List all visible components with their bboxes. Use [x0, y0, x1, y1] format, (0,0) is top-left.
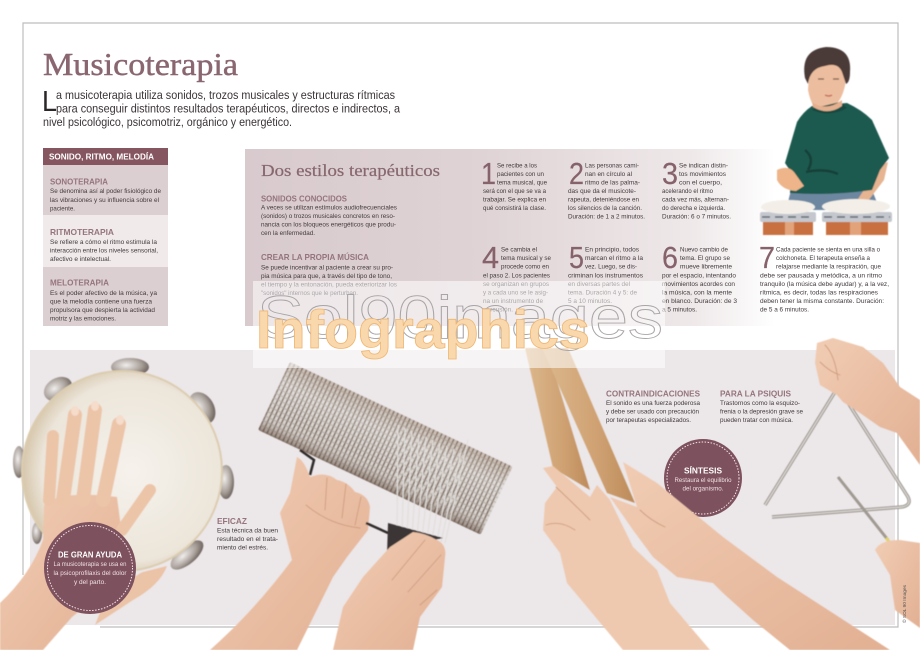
callout: para la psiquis	[720, 388, 803, 424]
step 5: vez. Luego, se dis-	[585, 264, 637, 270]
step 3	[662, 156, 731, 220]
guiro tines	[397, 425, 468, 543]
step 2: ritmo de las palma-	[585, 180, 640, 186]
badge: de gran ayuda: la psicoprofilaxis del dolor	[54, 570, 127, 577]
photo: boy playing bongos	[760, 47, 892, 235]
step 7: colchoneta. El terapeuta enseña a	[776, 255, 870, 262]
step 5: tema. Duración 4 y 5: de	[568, 290, 637, 296]
intro text: para conseguir distintos resultados terapéuticos, directos e indirectos, a	[56, 102, 400, 116]
callout: contraindicaciones	[606, 388, 700, 424]
text block: sonidos conocidos: nancia con los bloqueos energéticos que produ-	[261, 222, 396, 228]
sub-panel: sonoterapia: SONOTERAPIA	[50, 176, 108, 186]
sub-panel: sonoterapia: Se denomina así al poder fisiológico de	[50, 188, 161, 195]
text block: sonidos conocidos: cen la enfermedad.	[261, 230, 315, 237]
text block: sonidos conocidos	[261, 194, 398, 237]
guiro handle	[300, 450, 388, 533]
step 3: do derecha e izquierda.	[662, 205, 725, 212]
step 2: 2	[569, 156, 584, 191]
panel header	[43, 148, 168, 165]
step 4	[482, 240, 551, 314]
step 6: la música, con la mente	[662, 290, 732, 296]
sub-panel: ritmoterapia: afectivo e intelectual.	[50, 256, 111, 263]
sub-panel: ritmoterapia: RITMOTERAPIA	[50, 227, 114, 237]
intro text: nivel psicológico, psicomotriz, orgánico y energético.	[43, 115, 292, 129]
step 3: cada vez más, alternan-	[662, 196, 729, 204]
photo: triangle with hands	[765, 338, 920, 628]
step 1: qué consistirá la clase.	[483, 205, 546, 212]
photo: claves with hands	[525, 348, 890, 650]
upper hand	[610, 462, 890, 650]
badge: síntesis: del organismo.	[682, 486, 724, 492]
sub-panel: ritmoterapia	[43, 215, 168, 267]
step 3: acelerando el ritmo	[662, 188, 713, 195]
step 4: el paso 2. Los pacientes	[483, 272, 551, 280]
bongos	[760, 199, 892, 235]
heading: dos estilos: Dos estilos terapéuticos	[261, 161, 440, 180]
step 1: tema musical, que	[497, 180, 547, 186]
sub-panel: meloterapia	[43, 267, 168, 326]
callout: eficaz: miento del estrés.	[217, 544, 268, 552]
step 5	[568, 240, 644, 305]
step 6: en blanco. Duración: de 3	[662, 298, 737, 305]
step 1: pacientes con un	[497, 171, 544, 178]
callout: para la psiquis: frenia o la depresión grave se	[720, 408, 803, 416]
step 6	[662, 240, 737, 314]
text block: crear la propia música: "sonidos" internos que le perturban.	[261, 290, 358, 297]
callout: eficaz	[217, 516, 278, 552]
photo: tambourine with hand	[0, 358, 234, 650]
step 7: rítmica, es decir, todas las respiraciones	[760, 290, 879, 296]
step 5: en diversas partes del	[568, 281, 630, 288]
step 7: debe ser pausada y metódica, a un ritmo	[760, 272, 882, 280]
left hand	[210, 457, 370, 650]
upper hand	[815, 338, 920, 465]
watermark: sol90images: Sol90images	[257, 284, 663, 351]
title: Musicoterapia	[43, 46, 238, 82]
intro text: a musicoterapia utiliza sonidos, trozos musicales y estructuras rítmicas	[56, 88, 395, 102]
drop cap: L	[42, 86, 57, 118]
step 3: 3	[662, 156, 678, 191]
beater	[838, 477, 888, 540]
text block: crear la propia música: el tiempo y la entonación, pueda exteriorizar los	[261, 282, 398, 288]
text block: crear la propia música	[261, 251, 398, 297]
sub-panel: ritmoterapia: interacción entre los niveles sensorial,	[50, 248, 158, 254]
callout: eficaz: resultado en el trata-	[217, 536, 278, 543]
step 7: de 5 a 6 minutos.	[760, 306, 809, 314]
step 4: Se cambia el	[501, 246, 537, 254]
badge: de gran ayuda: La musicoterapia se usa en	[54, 561, 127, 568]
panel header: SONIDO, RITMO, MELODÍA	[49, 152, 154, 162]
step 2: Las personas cami-	[585, 162, 639, 170]
step 6: Nuevo cambio de	[680, 246, 728, 254]
sub-panel: meloterapia: que la melodía contiene una fuerza	[50, 298, 152, 306]
step 7: relajarse mediante la respiración, que	[776, 264, 881, 270]
callout: para la psiquis: pueden tratar con música.	[720, 417, 793, 424]
step 2: Duración: de 1 a 2 minutos.	[568, 214, 645, 220]
step 2: rapeuta, deteniéndose en	[568, 196, 639, 204]
step 5: marcan el ritmo a la	[585, 255, 643, 262]
panel: dos estilos terapéuticos	[245, 149, 775, 326]
step 6: movimientos acordes con	[662, 281, 735, 288]
step 6: mueve libremente	[680, 264, 732, 270]
panel: lower instruments background	[30, 350, 895, 625]
text block: sonidos conocidos: A veces se utilizan estímulos audiofrecuenciales	[261, 204, 398, 212]
sub-panel: meloterapia: MELOTERAPIA	[50, 278, 109, 288]
step 1: será con el que se va a	[483, 188, 546, 195]
callout: para la psiquis: Trastornos como la esquizo-	[720, 400, 800, 407]
step 2: nan en círculo al	[585, 171, 632, 178]
text block: crear la propia música: pia música para que, a través del tipo de tono,	[261, 273, 392, 280]
step 4: 4	[482, 240, 499, 275]
step 7: 7	[759, 240, 775, 275]
step 5: criminan los instrumentos	[568, 272, 644, 280]
text block: sonidos conocidos: SONIDOS CONOCIDOS	[261, 194, 347, 204]
step 1	[481, 156, 547, 212]
sub-panel: meloterapia: propulsora que despierta la actividad	[50, 307, 155, 314]
step 2	[568, 156, 645, 220]
watermark	[253, 281, 665, 368]
step 1: trabajar. Se explica en	[483, 196, 546, 204]
callout: para la psiquis: PARA LA PSIQUIS	[720, 388, 791, 398]
step 4: tema musical y se	[501, 255, 551, 262]
lower hand	[875, 540, 920, 628]
triangle	[765, 387, 909, 517]
step 5: En principio, todos	[585, 246, 640, 254]
text block: sonidos conocidos: (sonidos) o trozos musicales concretos en reso-	[261, 213, 395, 220]
guiro tube	[258, 362, 513, 535]
text block: crear la propia música: CREAR LA PROPIA MÚSICA	[261, 251, 369, 262]
panel: sonido, ritmo, melodía	[43, 148, 168, 326]
callout: contraindicaciones: y debe ser usado con precaución	[606, 408, 699, 416]
arm and hand	[0, 401, 167, 650]
watermark: infographics: Infographics	[256, 300, 590, 360]
sub-panel: meloterapia: Es el poder afectivo de la música, ya	[50, 290, 157, 297]
credit: © SOL 90 Images	[901, 584, 908, 623]
step 3: Se indican distin-	[679, 162, 728, 170]
step 4: se organizan en grupos	[483, 281, 550, 288]
step 6: tema. El grupo se	[680, 255, 730, 262]
callout: contraindicaciones: El sonido es una fuerza poderosa	[606, 400, 700, 407]
callout: contraindicaciones: por terapeutas especializados.	[606, 417, 691, 424]
callout: eficaz: Esta técnica da buen	[217, 528, 278, 534]
step 4: percusión.	[483, 306, 513, 314]
sub-panel: sonoterapia: paciente.	[50, 206, 75, 212]
lower hand	[543, 466, 710, 650]
clave sticks	[525, 348, 590, 490]
sub-panel: sonoterapia	[43, 165, 168, 215]
step 7: tranquilo (la música debe ayudar) y, a la vez,	[760, 281, 889, 288]
step 2: los silencios de la canción.	[568, 205, 642, 212]
jingles	[13, 358, 234, 575]
badge: de gran ayuda: DE GRAN AYUDA	[58, 550, 122, 560]
sub-panel: ritmoterapia: Se refiere a cómo el ritmo estimula la	[50, 239, 157, 246]
step 4: procede como en	[501, 264, 549, 270]
step 3: tos movimientos	[679, 171, 727, 178]
step 6: 6	[662, 240, 678, 275]
text block: crear la propia música: Se puede incentivar al paciente a crear su pro-	[261, 264, 393, 272]
step 1: 1	[481, 156, 496, 191]
sub-panel: meloterapia: motriz y las emociones.	[50, 316, 116, 322]
sub-panel: sonoterapia: las vibraciones y su influencia sobre el	[50, 197, 159, 204]
badge: síntesis	[664, 439, 742, 517]
callout: eficaz: EFICAZ	[217, 516, 247, 526]
step 7	[759, 240, 889, 314]
badge: síntesis: Restaura el equilibrio	[674, 477, 732, 484]
step 3: Duración: 6 o 7 minutos.	[662, 214, 731, 220]
step 6: a 5 minutos.	[662, 306, 697, 314]
step 4: na un instrumento de	[483, 298, 543, 305]
step 2: das que da el musicote-	[568, 188, 636, 195]
guiro scraper	[387, 523, 443, 555]
badge: de gran ayuda	[44, 522, 136, 614]
step 7: Cada paciente se sienta en una silla o	[776, 246, 880, 254]
step 4: y a cada uno se le asig-	[483, 290, 548, 296]
step 1: Se recibe a los	[497, 162, 538, 170]
photo: guiro with hands	[210, 362, 513, 650]
right hand	[333, 532, 445, 650]
step 6: por el espacio, intentando	[662, 272, 736, 280]
step 7: deben tener la misma constante. Duración:	[760, 298, 884, 305]
step 5: 5	[569, 240, 584, 275]
badge: síntesis: SÍNTESIS	[684, 466, 723, 476]
step 5: 5 a 10 minutos.	[568, 298, 612, 305]
badge: de gran ayuda: y del parto.	[74, 579, 106, 586]
callout: contraindicaciones: CONTRAINDICACIONES	[606, 388, 700, 398]
intro text	[42, 86, 400, 129]
step 3: con el cuerpo,	[679, 180, 722, 186]
